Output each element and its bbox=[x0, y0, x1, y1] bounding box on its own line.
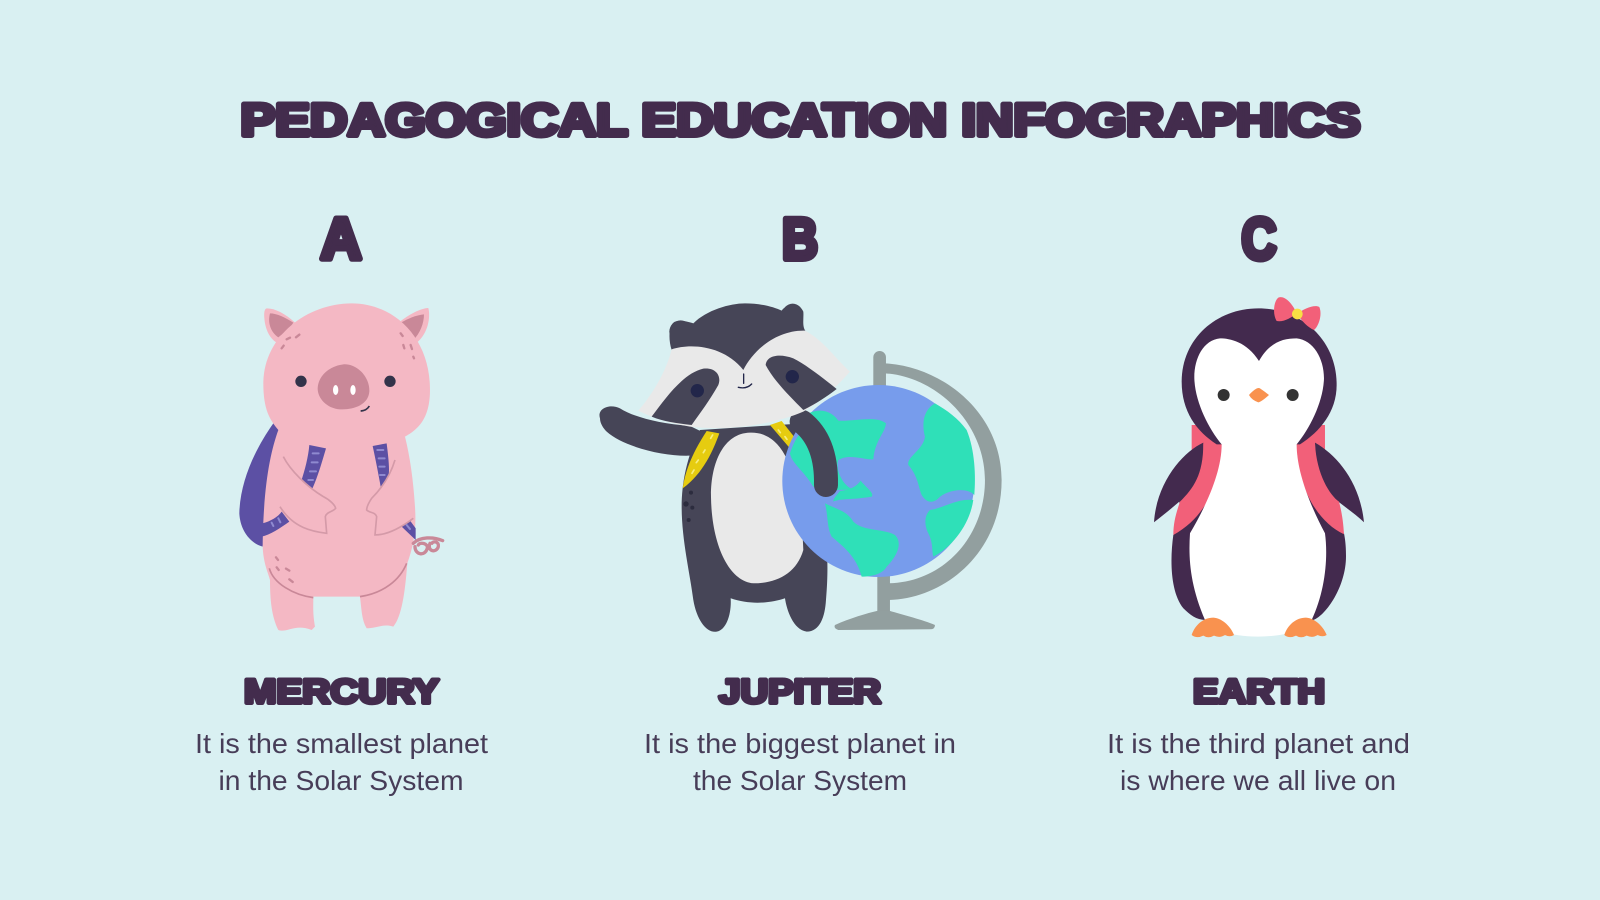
panel: C Earth bbox=[1107, 207, 1410, 796]
text: Mercury description: It is the smallest planet bbox=[195, 728, 488, 759]
icon: badger with globe bbox=[599, 303, 1002, 632]
letter C: C bbox=[1242, 207, 1276, 272]
text: Jupiter description bbox=[644, 728, 956, 796]
text: Earth description: It is the third planet and bbox=[1107, 728, 1410, 759]
icon: pig with backpack bbox=[239, 303, 443, 631]
icon: penguin with bow bbox=[1154, 297, 1364, 637]
heading: Jupiter: JUPITER bbox=[719, 673, 881, 711]
title: PEDAGOGICAL EDUCATION INFOGRAPHICS bbox=[240, 94, 1360, 146]
panel: A Mercury bbox=[195, 207, 488, 796]
text: Earth description: is where we all live on bbox=[1120, 765, 1396, 796]
text: Mercury description: in the Solar System bbox=[218, 765, 464, 796]
text: Jupiter description: the Solar System bbox=[693, 765, 907, 796]
letter B: B bbox=[782, 207, 818, 272]
text: Mercury description bbox=[195, 728, 488, 796]
text: Earth description bbox=[1107, 728, 1410, 796]
panel: B Jupiter bbox=[599, 207, 1002, 796]
heading: Earth: EARTH bbox=[1193, 673, 1325, 711]
letter A: A bbox=[320, 207, 362, 272]
text: Jupiter description: It is the biggest planet in bbox=[644, 728, 956, 759]
heading: Mercury: MERCURY bbox=[244, 673, 439, 711]
